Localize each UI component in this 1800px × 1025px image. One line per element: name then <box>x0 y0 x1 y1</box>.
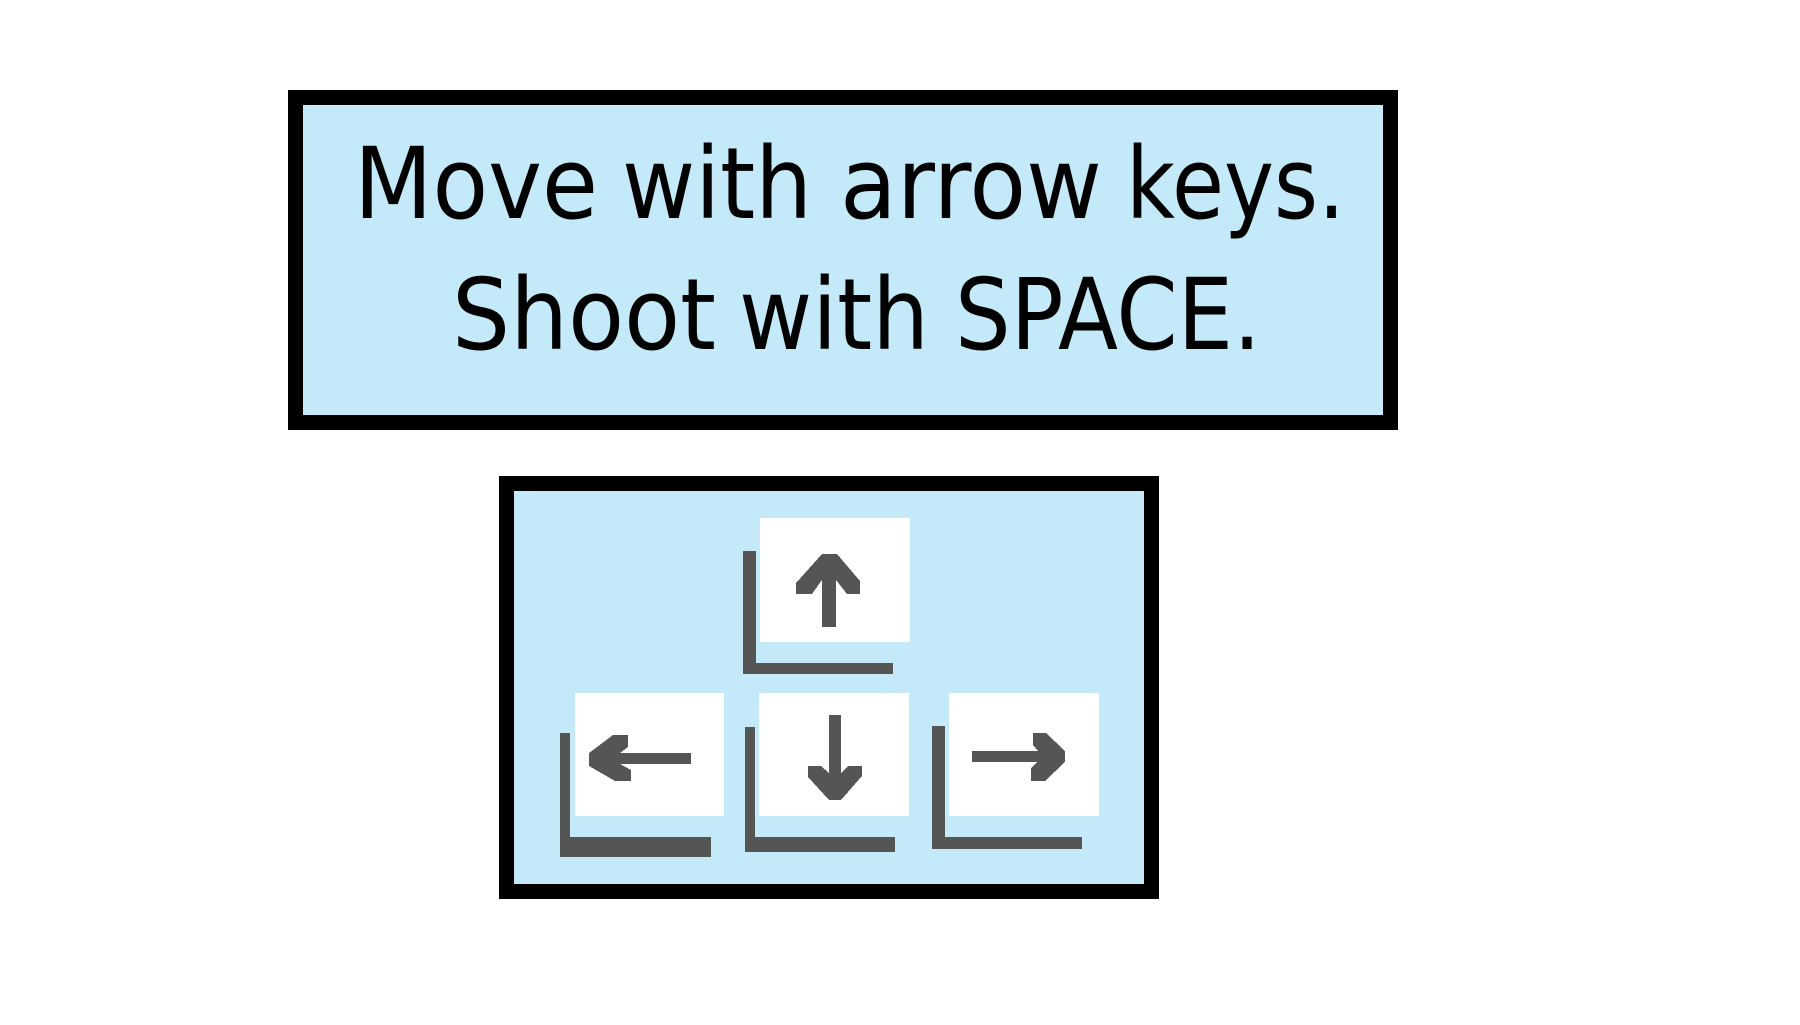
key: left arrow <box>560 693 724 857</box>
icon: right arrow <box>972 733 1065 781</box>
arrow keys panel background <box>506 484 1152 892</box>
text: move instruction: keys. <box>1126 127 1345 242</box>
text: shoot instruction: SPACE. <box>955 258 1261 373</box>
text: move instruction: arrow <box>840 127 1102 242</box>
key: right arrow <box>932 693 1099 849</box>
instructions panel background <box>296 98 1390 422</box>
icon: up arrow <box>796 554 860 627</box>
text: shoot instruction: with <box>739 258 929 373</box>
text: move instruction: with <box>622 127 812 242</box>
key: up arrow <box>743 518 910 674</box>
text: shoot instruction: Shoot <box>452 258 716 373</box>
key: down arrow <box>745 693 909 852</box>
text: move instruction: Move <box>354 127 598 242</box>
icon: left arrow <box>589 735 691 781</box>
panel: arrow keys <box>506 484 1152 892</box>
panel: instructions <box>296 98 1390 422</box>
icon: down arrow <box>808 715 862 800</box>
